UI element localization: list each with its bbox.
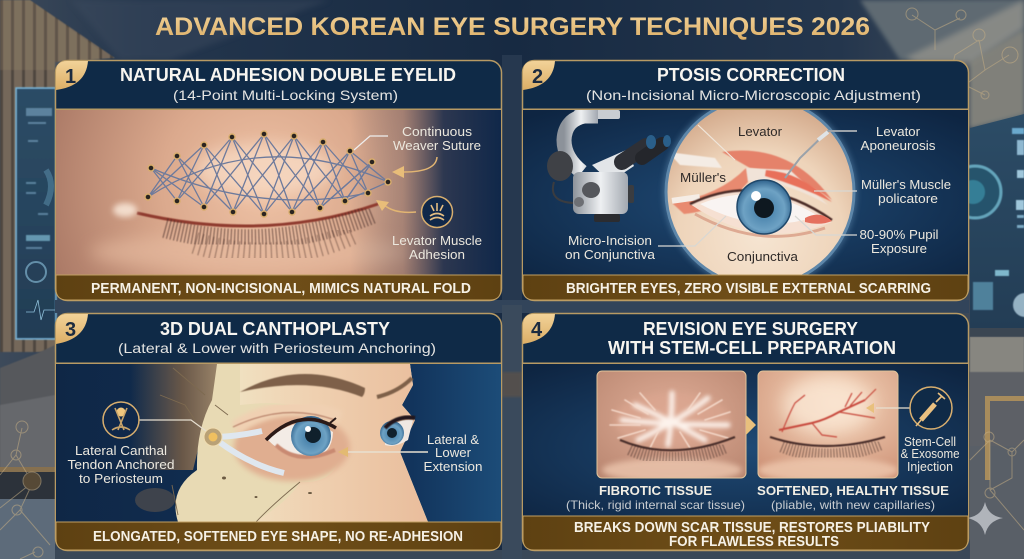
label: lateral and lower extension <box>424 433 483 474</box>
label: lateral canthal tendon <box>68 444 175 486</box>
eyelid illustration <box>56 110 501 275</box>
label: fibrotic tissue: FIBROTIC TISSUE <box>599 483 712 498</box>
label: lateral and lower extension: Lower <box>435 446 471 460</box>
number tab 2 <box>523 61 555 90</box>
label: levator aponeurosis <box>860 125 936 153</box>
image backdrop <box>523 110 968 275</box>
header rule <box>523 108 968 110</box>
label: micro-incision: on Conjunctiva <box>565 248 655 262</box>
label: lateral and lower extension: Lateral & <box>427 433 480 447</box>
number tab 3: 3 <box>65 319 76 341</box>
suture points <box>145 131 391 217</box>
label: softened tissue: (pliable, with new capillaries) <box>771 498 935 512</box>
label: stem-cell injection: Injection <box>907 460 953 474</box>
panel: natural adhesion double eyelid <box>56 60 502 300</box>
arrow: injection pointer <box>866 403 910 413</box>
subheading: (Lateral & Lower with Periosteum Anchoring) <box>118 340 436 356</box>
label: fibrotic tissue <box>566 483 745 512</box>
label: conjunctiva: Conjunctiva <box>727 250 798 264</box>
footer banner: PERMANENT, NON-INCISIONAL, MIMICS NATURAL FOLD <box>91 281 471 297</box>
icon: tendon anchor <box>204 428 222 446</box>
label: levator aponeurosis: Levator <box>876 125 920 139</box>
arrow: to suture <box>392 157 437 178</box>
label: lateral canthal tendon: Lateral Canthal <box>75 444 167 458</box>
label: levator muscle adhesion: Levator Muscle <box>392 234 482 248</box>
arrow: anchor line <box>139 420 206 431</box>
label: lateral and lower extension: Extension <box>424 460 483 474</box>
photo: softened tissue <box>758 371 898 482</box>
arrow: extension <box>338 447 428 457</box>
label: stem-cell injection: Stem-Cell <box>904 435 956 449</box>
footer banner <box>523 516 968 550</box>
footer banner <box>56 522 501 550</box>
label: micro-incision <box>565 234 655 262</box>
label: continuous weaver suture: Weaver Suture <box>393 139 481 153</box>
footer banner: ELONGATED, SOFTENED EYE SHAPE, NO RE-ADHESION <box>93 529 463 545</box>
label: micro-incision: Micro-Incision <box>568 234 652 248</box>
photo: fibrotic tissue <box>597 371 746 482</box>
number tab 4 <box>523 314 555 344</box>
label: muller's: Müller's <box>680 171 726 185</box>
icon: levator muscle <box>422 196 452 228</box>
footer banner <box>56 275 501 300</box>
panel: 3d dual canthoplasty <box>56 314 502 550</box>
footer banner: BRIGHTER EYES, ZERO VISIBLE EXTERNAL SCARRING <box>566 281 931 297</box>
heading <box>608 319 896 358</box>
magnified eye lens <box>661 110 859 274</box>
label: levator: Levator <box>738 125 782 139</box>
arrow: to levator <box>376 200 416 212</box>
arrow: between photos <box>746 415 756 435</box>
footer banner: BREAKS DOWN SCAR TISSUE, RESTORES PLIABILITY <box>574 520 930 536</box>
subheading: (Non-Incisional Micro-Microscopic Adjustment) <box>586 87 921 103</box>
icon: syringe <box>910 387 952 429</box>
label: softened tissue: SOFTENED, HEALTHY TISSUE <box>757 483 949 498</box>
label: muller's muscle: Müller's Muscle <box>861 178 951 192</box>
heading: WITH STEM-CELL PREPARATION <box>608 338 896 358</box>
number tab 4: 4 <box>531 319 543 341</box>
label: muller's muscle <box>861 178 951 206</box>
callout lines and instrument <box>658 125 857 246</box>
subheading: (14-Point Multi-Locking System) <box>173 87 398 103</box>
icon: sparkle <box>967 502 1003 535</box>
number tab 1 <box>56 61 88 90</box>
image backdrop <box>523 364 968 516</box>
footer banner <box>523 275 968 300</box>
label: lateral canthal tendon: Tendon Anchored <box>68 458 175 472</box>
panel: ptosis correction <box>522 60 968 300</box>
photo frame right <box>758 371 898 478</box>
label: fibrotic tissue: (Thick, rigid internal scar tissue) <box>566 498 745 512</box>
title: ADVANCED KOREAN EYE SURGERY TECHNIQUES 2026 <box>155 13 870 41</box>
heading: PTOSIS CORRECTION <box>657 65 845 85</box>
label: continuous weaver suture: Continuous <box>402 125 472 139</box>
label: levator aponeurosis: Aponeurosis <box>860 139 936 153</box>
label: pupil exposure: Exposure <box>871 242 927 256</box>
header rule <box>523 362 968 364</box>
label: levator muscle adhesion <box>392 234 482 262</box>
label: pupil exposure <box>860 228 938 256</box>
suture lattice <box>148 134 388 214</box>
label: pupil exposure: 80-90% Pupil <box>860 228 938 242</box>
number tab 1: 1 <box>65 66 76 88</box>
label: muller's muscle: policatore <box>878 192 938 206</box>
label: stem-cell injection: & Exosome <box>900 447 960 461</box>
number tab 3 <box>56 314 88 344</box>
microscope <box>547 110 671 222</box>
label: levator muscle adhesion: Adhesion <box>409 248 465 262</box>
header band rule <box>56 108 501 110</box>
panel: revision eye surgery <box>522 314 968 550</box>
icon: periosteum <box>103 402 139 438</box>
arrow: suture pointer <box>354 136 388 150</box>
photo frame left <box>597 371 746 478</box>
heading: REVISION EYE SURGERY <box>643 319 858 339</box>
face and skull illustration <box>56 364 501 522</box>
label: softened tissue <box>757 483 949 512</box>
label: stem-cell injection <box>900 435 960 474</box>
heading: 3D DUAL CANTHOPLASTY <box>160 319 390 339</box>
footer banner: FOR FLAWLESS RESULTS <box>669 534 839 550</box>
label: lateral canthal tendon: to Periosteum <box>79 472 163 486</box>
heading: NATURAL ADHESION DOUBLE EYELID <box>120 65 456 85</box>
number tab 2: 2 <box>532 66 543 88</box>
header rule <box>56 362 501 364</box>
label: continuous weaver suture <box>393 125 481 153</box>
